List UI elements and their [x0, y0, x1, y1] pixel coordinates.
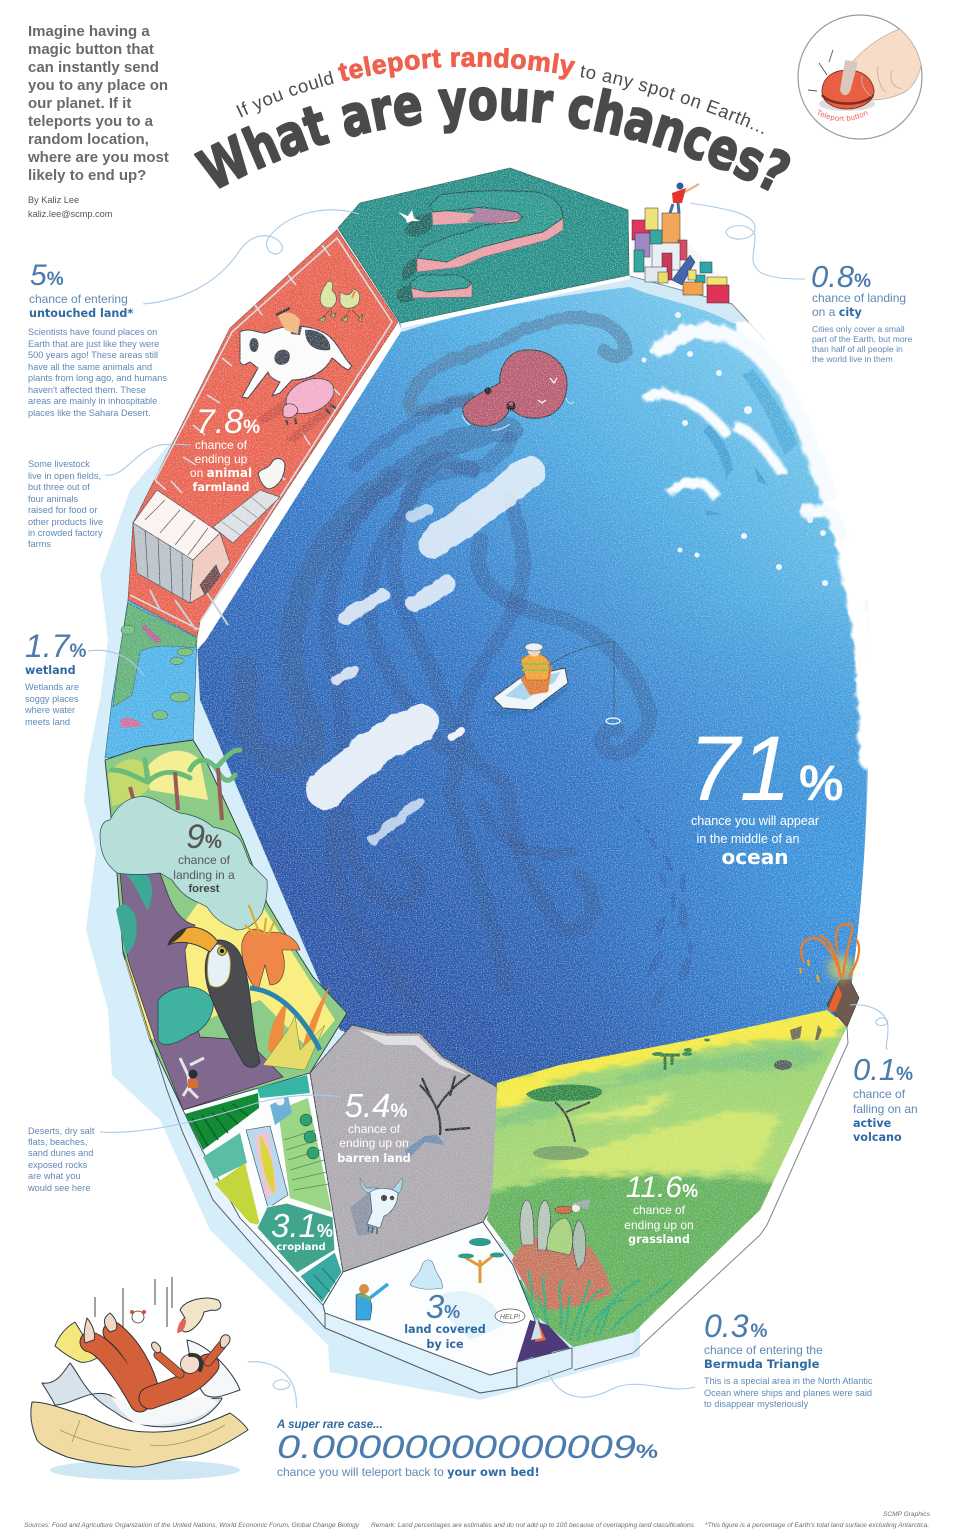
- kid throwing snowball: [356, 1284, 388, 1320]
- callout: 0.1% volcano: volcano: [853, 1131, 902, 1144]
- callout: 7.8% farmland: ending up: [195, 452, 248, 466]
- waves: [642, 312, 868, 760]
- panel: untouched land (teal): [338, 168, 629, 323]
- snowman: [410, 1260, 443, 1289]
- octopus tentacles: [246, 317, 650, 1003]
- panel: volcano: [800, 924, 859, 1043]
- title: main heading arc: What are your chances?: [194, 86, 790, 191]
- callout: 0.1% volcano: active: [853, 1117, 892, 1130]
- callout: 5% untouched land: areas are mainly in inhospitable: [28, 396, 157, 406]
- note: deserts: [27, 1126, 95, 1193]
- byline: kaliz.lee@scmp.com: [28, 209, 113, 219]
- byline: By Kaliz Lee: [28, 195, 79, 205]
- note: deserts: Deserts, dry salt: [28, 1126, 95, 1136]
- callout: 5.4% barren land: ending up on: [339, 1136, 409, 1150]
- fish shadows: [618, 804, 694, 1010]
- callout: 9% forest: chance of: [178, 853, 231, 867]
- panel: grassland: [484, 1006, 850, 1352]
- man on the skyscraper: [670, 182, 699, 213]
- intro text: our planet. If it: [28, 95, 131, 112]
- note: livestock: Some livestock: [28, 459, 90, 469]
- callout: 0.8% city: on a city: [812, 305, 863, 319]
- top water edge: [400, 276, 765, 340]
- callout: 0.8% city: Cities only cover a small: [812, 324, 905, 334]
- harvester with corn: [246, 1126, 288, 1208]
- note: livestock: raised for food or: [28, 505, 97, 515]
- callout: 7.8% farmland: [190, 403, 260, 494]
- callout: 71% ocean: in the middle of an: [697, 832, 799, 846]
- intro text: likely to end up?: [28, 167, 146, 184]
- pillow: [187, 1340, 240, 1397]
- intro text: can instantly send: [28, 59, 159, 76]
- note: livestock: other products live: [28, 517, 103, 527]
- termite mound: [512, 1237, 612, 1310]
- callout: super rare case: A super rare case...: [276, 1419, 383, 1431]
- note: deserts: exposed rocks: [28, 1160, 88, 1170]
- bed shadow: [50, 1460, 240, 1480]
- callout: 0.1% volcano: 0.1%: [853, 1052, 913, 1087]
- callout: 5% untouched land: chance of entering: [29, 292, 128, 306]
- callout: 1.7% wetland: wetland: [25, 664, 76, 677]
- callout: 5% untouched land: haven't affected them. These: [28, 385, 146, 395]
- callout: 0.1% volcano: falling on an: [853, 1102, 918, 1116]
- callout: 5% untouched land: 500 years ago! These areas still: [28, 350, 158, 360]
- connector lines: [88, 203, 888, 1408]
- intro text: [27, 23, 169, 184]
- tall grass: [520, 1270, 672, 1340]
- dead tree: [405, 1135, 445, 1160]
- icon: teleport button: Teleport button: [818, 110, 868, 122]
- intro text: you to any place on: [28, 77, 168, 94]
- callout: 3% ice: land covered: [404, 1323, 486, 1336]
- intro text: random location,: [28, 131, 149, 148]
- callout: 11.6% grassland: chance of: [633, 1203, 686, 1217]
- callout: 7.8% farmland: chance of: [195, 438, 248, 452]
- note: livestock: but three out of: [28, 482, 90, 492]
- help bubble: [495, 1309, 525, 1323]
- callout: 5% untouched land: [28, 259, 167, 418]
- callout: 9% forest: landing in a: [173, 868, 235, 882]
- credits: Sources: Food and Agriculture Organization of the United Nations, World Economic Forum, Global Change Biology: [24, 1522, 360, 1529]
- callout: 71% ocean: chance you will appear: [691, 814, 819, 828]
- icon: question mark island: [397, 191, 563, 303]
- callout: 1.7% wetland: 1.7%: [25, 628, 86, 664]
- callout: 0.3% Bermuda Triangle: to disappear mysteriously: [704, 1399, 809, 1409]
- block outline: [633, 1043, 848, 1353]
- note: deserts: are what you: [28, 1171, 81, 1181]
- zebras and antelope: [774, 1060, 792, 1070]
- palms: [112, 750, 240, 782]
- intro text: where are you most: [27, 149, 169, 166]
- callout: 71% ocean: ocean: [722, 845, 788, 869]
- panel: ice: [323, 1222, 535, 1393]
- callout: 0.8% city: chance of landing: [812, 291, 906, 305]
- intro text: Imagine having a: [28, 23, 150, 40]
- callout: 1.7% wetland: meets land: [25, 717, 70, 727]
- octopus head: [463, 350, 567, 426]
- note: livestock: [28, 459, 103, 549]
- note: livestock: farms: [28, 539, 51, 549]
- panel: forest: [100, 740, 347, 1110]
- callout: 7.8% farmland: 7.8%: [196, 403, 260, 441]
- callout: 11.6% grassland: grassland: [628, 1233, 690, 1246]
- callout: 5% untouched land: Earth that are just like they were: [28, 339, 159, 349]
- snowy tree: [466, 1255, 494, 1283]
- callout: 3.1% cropland: cropland: [276, 1242, 326, 1253]
- help bubble: HELP!: [500, 1314, 520, 1321]
- callout: 0.3% Bermuda Triangle: This is a special area in the North Atlantic: [704, 1376, 873, 1386]
- callout: super rare case: chance you will teleport back to your own bed!: [277, 1465, 540, 1479]
- ducks: [318, 281, 363, 322]
- callout: 0.8% city: than half of all people in: [812, 344, 903, 354]
- panel: Bermuda Triangle: [517, 1318, 633, 1387]
- barn: [133, 490, 280, 630]
- note: deserts: sand dunes and: [28, 1148, 93, 1158]
- callout: 0.1% volcano: [853, 1052, 918, 1144]
- clouds: [325, 472, 530, 840]
- callout: 0.3% Bermuda Triangle: chance of entering the: [704, 1343, 823, 1357]
- flower: [242, 905, 300, 990]
- panel: ocean: [197, 276, 869, 1090]
- callout: 5% untouched land: places like the Sahara Desert.: [28, 408, 151, 418]
- callout: 0.3% Bermuda Triangle: Bermuda Triangle: [704, 1357, 820, 1371]
- pig: [281, 372, 339, 425]
- callout: 71% ocean: 71%: [689, 718, 843, 820]
- callout: 7.8% farmland: farmland: [193, 481, 249, 494]
- callout: 9% forest: forest: [188, 883, 220, 895]
- icon: teleport button: [797, 14, 923, 140]
- mattress: [31, 1402, 248, 1467]
- credits: [24, 1511, 931, 1529]
- credits: SCMP Graphics: [883, 1511, 931, 1518]
- person in red pyjamas: [84, 1313, 230, 1402]
- panel: animal farmland: [128, 230, 398, 637]
- teal hexagon plot: [257, 1203, 335, 1273]
- callout: 1.7% wetland: soggy places: [25, 694, 79, 704]
- callout: 3% ice: [404, 1288, 486, 1351]
- sheet: [42, 1363, 222, 1427]
- callout: 3.1% cropland: 3.1%: [271, 1207, 333, 1244]
- callout: 7.8% farmland: on animal: [190, 466, 252, 480]
- flamingo: [142, 625, 161, 642]
- callout: 11.6% grassland: [624, 1171, 698, 1246]
- callout: 0.8% city: [811, 259, 913, 364]
- meerkats and explorer: [520, 1199, 590, 1270]
- callout: 0.8% city: the world live in them: [812, 354, 893, 364]
- callout: 11.6% grassland: ending up on: [624, 1218, 694, 1232]
- credits: Remark: Land percentages are estimates and do not add up to 100 because of overlapping land classifications: [371, 1522, 695, 1529]
- illustration: falling back to bed: [31, 1277, 248, 1480]
- leaves: [158, 987, 213, 1045]
- farmer: [270, 1096, 292, 1125]
- callout: super rare case: [276, 1419, 658, 1479]
- callout: 3% ice: by ice: [426, 1338, 464, 1351]
- callout: 11.6% grassland: 11.6%: [626, 1171, 698, 1204]
- intro text: magic button that: [28, 41, 154, 58]
- callout: 0.3% Bermuda Triangle: 0.3%: [704, 1308, 767, 1344]
- icon: seagull: [398, 210, 420, 223]
- callout: 5% untouched land: have all the same animals and: [28, 362, 152, 372]
- climber: [180, 1058, 204, 1098]
- callout: 0.8% city: 0.8%: [811, 259, 871, 294]
- callout: 5.4% barren land: chance of: [348, 1122, 401, 1136]
- callout: 0.1% volcano: chance of: [853, 1087, 906, 1101]
- callout: 3% ice: 3%: [426, 1288, 460, 1325]
- intro text: teleports you to a: [28, 113, 154, 130]
- callout: 9% forest: [173, 818, 235, 895]
- alarm clock: [132, 1311, 144, 1323]
- decorative water shadow: [84, 420, 640, 1400]
- callout: 5.4% barren land: [337, 1087, 411, 1165]
- callout: 0.8% city: part of the Earth, but more: [812, 334, 913, 344]
- cow: [240, 308, 352, 398]
- note: livestock: four animals: [28, 494, 78, 504]
- fisherman in boat: [484, 641, 620, 724]
- note: livestock: live in open fields,: [28, 471, 101, 481]
- tree trunk: [120, 873, 283, 1110]
- note: deserts: would see here: [27, 1183, 90, 1193]
- toucan: [168, 927, 260, 1067]
- fence: [130, 238, 392, 630]
- callout: 5% untouched land: 5%: [30, 259, 64, 292]
- callout: 5.4% barren land: 5.4%: [345, 1087, 407, 1124]
- callout: 0.3% Bermuda Triangle: Ocean where ships and planes were said: [704, 1388, 872, 1398]
- credits: *This figure is a percentage of Earth's total land surface excluding Antarctica.: [705, 1522, 929, 1529]
- panel: city: [632, 182, 730, 303]
- callout: 0.3% Bermuda Triangle: [704, 1308, 873, 1409]
- note: livestock: in crowded factory: [28, 528, 103, 538]
- motion lines: [95, 1277, 172, 1327]
- panel: wetland: [105, 600, 197, 758]
- callout: 5% untouched land: untouched land*: [29, 307, 133, 320]
- rabbit toy: [180, 1298, 221, 1332]
- panel: barren land: [310, 1025, 497, 1272]
- callout: 1.7% wetland: Wetlands are: [25, 682, 79, 692]
- shadows: [258, 395, 335, 442]
- callout: 5% untouched land: Scientists have found places on: [28, 327, 157, 337]
- callout: 5% untouched land: plants from long ago, and humans: [28, 373, 167, 383]
- byline: [28, 195, 113, 219]
- acacia tree: [526, 1084, 602, 1160]
- callout: 9% forest: 9%: [186, 818, 222, 856]
- callout: super rare case: 0.00000000000009 %: [277, 1429, 658, 1465]
- note: deserts: flats, beaches,: [28, 1137, 87, 1147]
- callout: 5.4% barren land: barren land: [337, 1152, 411, 1165]
- title: subtitle arc: If you could teleport randomly to any spot on Earth...: [236, 48, 764, 134]
- callout: 1.7% wetland: where water: [24, 705, 75, 715]
- callout: 71% ocean: [689, 718, 843, 869]
- panel: cropland: [183, 1073, 345, 1305]
- cloud: [100, 797, 267, 930]
- skull: [350, 1178, 402, 1236]
- callout: 1.7% wetland: [24, 628, 86, 727]
- chicken: [258, 459, 285, 489]
